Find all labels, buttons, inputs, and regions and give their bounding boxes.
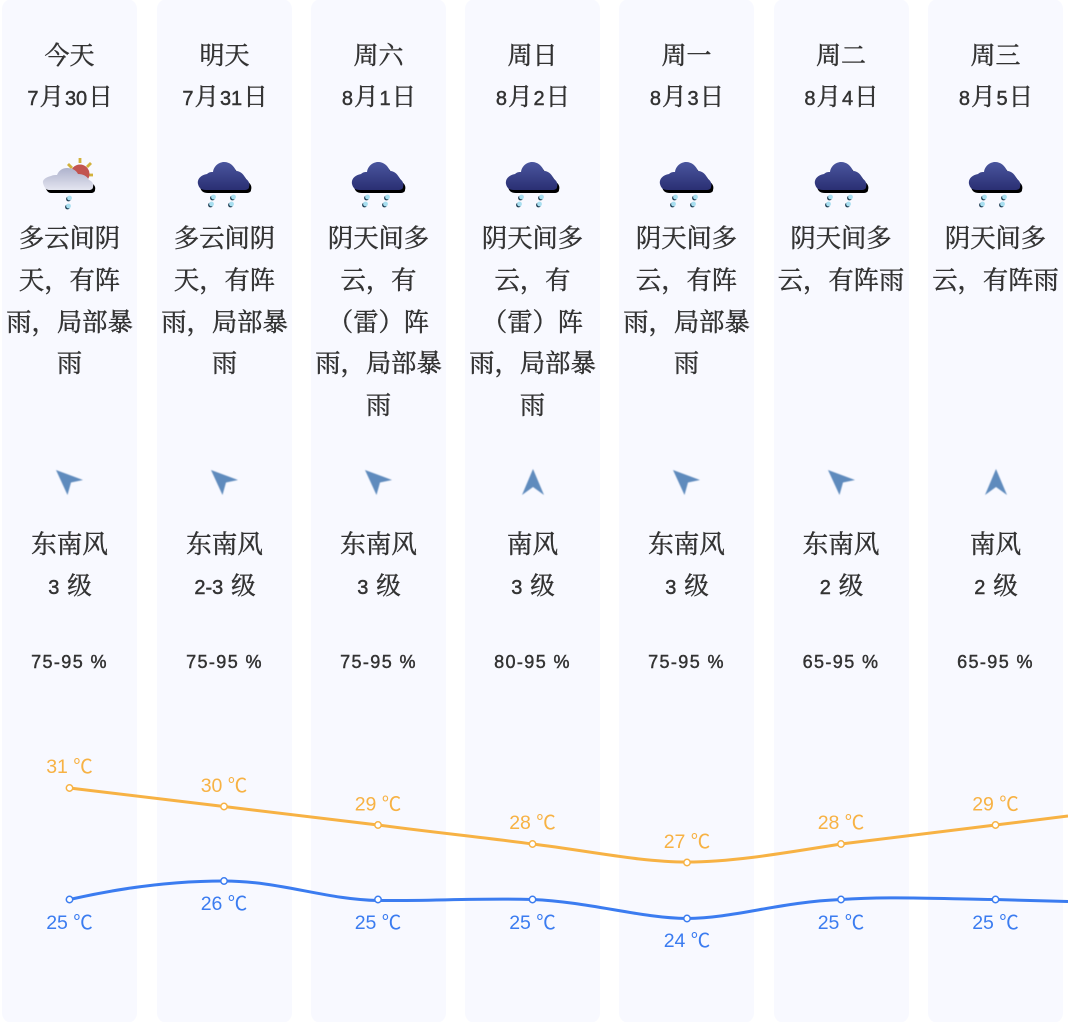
high temperature series: 29 ℃ bbox=[972, 794, 1019, 816]
day label: 周日 bbox=[507, 42, 558, 70]
wind level: 3 级 bbox=[511, 573, 555, 600]
weather description bbox=[932, 224, 1059, 295]
weather description: 阴天间多 bbox=[790, 225, 892, 253]
weather description: 雨，局部暴 bbox=[623, 308, 750, 336]
day label: 周二 bbox=[816, 42, 866, 70]
icon: rain cloud bbox=[968, 162, 1022, 208]
weather description: 云，有 bbox=[495, 267, 570, 295]
day label: 周六 bbox=[353, 42, 404, 70]
weather description: 云，有 bbox=[341, 267, 416, 295]
icon: wind direction bbox=[984, 468, 1008, 496]
weather description: 阴天间多 bbox=[482, 225, 583, 253]
weather description: 雨 bbox=[674, 350, 699, 378]
high temperature series: 31 ℃ bbox=[46, 756, 93, 778]
low temperature series: 25 ℃ bbox=[46, 912, 93, 934]
weather description bbox=[315, 224, 442, 420]
date: 8月1日 bbox=[342, 84, 416, 111]
icon: wind direction bbox=[672, 470, 700, 496]
weather description: 云，有阵 bbox=[636, 267, 737, 295]
weather description bbox=[469, 224, 596, 420]
icon: wind direction bbox=[210, 470, 238, 496]
date: 7月31日 bbox=[182, 84, 268, 111]
high temperature series: 29 ℃ bbox=[355, 794, 401, 816]
weather description: 雨 bbox=[212, 350, 237, 378]
wind direction text: 东南风 bbox=[186, 531, 263, 559]
panel: monday bbox=[619, 0, 754, 1022]
low temperature series: 25 ℃ bbox=[509, 912, 556, 934]
wind direction text: 东南风 bbox=[648, 531, 725, 559]
weather description bbox=[623, 224, 750, 378]
humidity: 75-95 % bbox=[340, 652, 417, 672]
weather description: 雨，局部暴 bbox=[161, 308, 288, 336]
weather description: 云，有阵雨 bbox=[932, 267, 1059, 295]
humidity: 75-95 % bbox=[186, 652, 263, 672]
icon: rain cloud bbox=[814, 162, 868, 208]
wind level: 2 级 bbox=[820, 573, 863, 600]
weather description: 阴天间多 bbox=[945, 225, 1046, 253]
wind level: 3 级 bbox=[357, 573, 401, 600]
icon: rain cloud bbox=[506, 162, 560, 208]
panel: tuesday bbox=[774, 0, 908, 1022]
high temperature series bbox=[46, 756, 1068, 866]
wind direction text: 南风 bbox=[970, 531, 1021, 559]
date: 7月30日 bbox=[27, 84, 113, 111]
date: 8月4日 bbox=[804, 84, 879, 111]
high temperature series: 28 ℃ bbox=[818, 812, 864, 834]
weather description: 云，有阵雨 bbox=[778, 267, 904, 295]
wind direction text: 南风 bbox=[507, 531, 558, 559]
weather description: 雨，局部暴 bbox=[469, 350, 596, 378]
weather description bbox=[161, 224, 288, 378]
weather description: 雨，局部暴 bbox=[315, 350, 442, 378]
panel: sunday bbox=[465, 0, 600, 1022]
date: 8月2日 bbox=[496, 84, 570, 111]
weather description: 多云间阴 bbox=[174, 225, 275, 253]
date: 8月3日 bbox=[650, 84, 724, 111]
weather description: 阴天间多 bbox=[636, 225, 737, 253]
icon: rain cloud bbox=[352, 162, 406, 208]
wind level: 3 级 bbox=[665, 573, 709, 600]
humidity: 65-95 % bbox=[803, 652, 879, 672]
low temperature series: 24 ℃ bbox=[664, 930, 710, 952]
day label: 周一 bbox=[661, 42, 712, 70]
day label: 周三 bbox=[970, 42, 1020, 70]
weather description bbox=[6, 224, 133, 378]
humidity: 75-95 % bbox=[31, 652, 108, 672]
wind level: 3 级 bbox=[48, 573, 92, 600]
humidity: 65-95 % bbox=[957, 652, 1034, 672]
low temperature series: 25 ℃ bbox=[972, 912, 1019, 934]
wind direction text: 东南风 bbox=[803, 531, 879, 559]
weather description: 雨 bbox=[366, 392, 391, 420]
weather description: （雷）阵 bbox=[482, 308, 583, 336]
wind direction text: 东南风 bbox=[31, 531, 108, 559]
humidity: 75-95 % bbox=[648, 652, 725, 672]
weather description: 天，有阵 bbox=[19, 267, 120, 295]
wind level: 2-3 级 bbox=[194, 573, 256, 600]
icon: partly cloudy with rain bbox=[42, 158, 96, 210]
weather description: 雨，局部暴 bbox=[6, 308, 133, 336]
weather description: 天，有阵 bbox=[174, 267, 275, 295]
weather description: 雨 bbox=[57, 350, 82, 378]
icon: wind direction bbox=[828, 470, 855, 496]
date: 8月5日 bbox=[959, 84, 1033, 111]
icon: wind direction bbox=[56, 470, 83, 496]
panel: wednesday bbox=[928, 0, 1063, 1022]
icon: rain cloud bbox=[660, 162, 714, 208]
low temperature series bbox=[46, 878, 1068, 952]
weather description: 多云间阴 bbox=[19, 225, 120, 253]
low temperature series: 25 ℃ bbox=[355, 912, 401, 934]
panel: saturday bbox=[311, 0, 446, 1022]
low temperature series: 26 ℃ bbox=[201, 893, 247, 915]
wind level: 2 级 bbox=[974, 573, 1018, 600]
weather description bbox=[778, 224, 904, 295]
weather description: （雷）阵 bbox=[328, 308, 429, 336]
high temperature series: 30 ℃ bbox=[201, 775, 247, 797]
icon: wind direction bbox=[364, 470, 392, 496]
high temperature series: 28 ℃ bbox=[509, 812, 556, 834]
humidity: 80-95 % bbox=[494, 652, 571, 672]
panel: today bbox=[2, 0, 137, 1022]
weather description: 雨 bbox=[520, 392, 545, 420]
low temperature series: 25 ℃ bbox=[818, 912, 864, 934]
icon: wind direction bbox=[522, 468, 544, 496]
wind direction text: 东南风 bbox=[340, 531, 417, 559]
weather description: 阴天间多 bbox=[328, 225, 429, 253]
panel: tomorrow bbox=[157, 0, 292, 1022]
icon: rain cloud bbox=[198, 162, 252, 208]
high temperature series: 27 ℃ bbox=[664, 831, 710, 853]
day label: 明天 bbox=[199, 42, 250, 70]
day label: 今天 bbox=[44, 42, 94, 70]
